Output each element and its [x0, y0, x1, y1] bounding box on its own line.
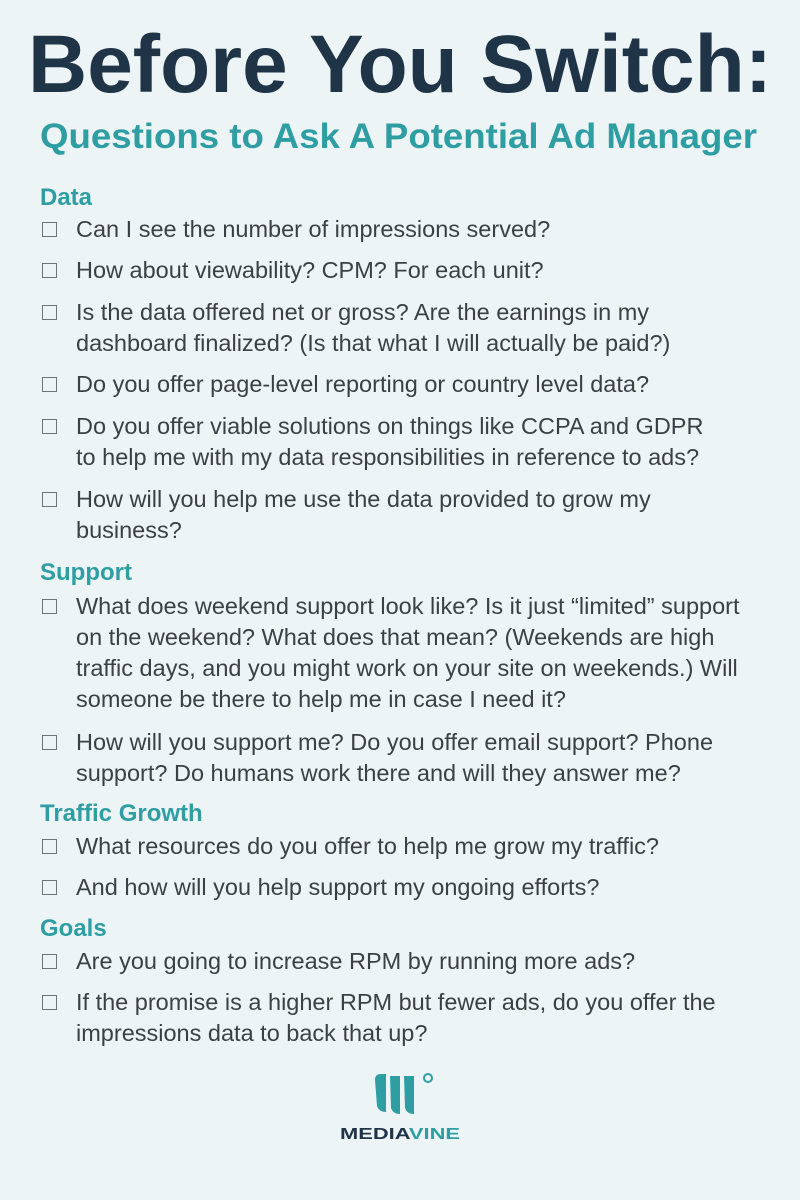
text: Is the data offered net or gross? Are the earnings in my — [76, 299, 649, 325]
text: to help me with my data responsibilities in reference to ads? — [76, 444, 699, 470]
item — [42, 593, 740, 712]
logo: MEDIA VINE — [340, 1126, 460, 1143]
text: Do you offer viable solutions on things like CCPA and GDPR — [76, 413, 703, 439]
text: Can I see the number of impressions served? — [76, 216, 550, 242]
text: Are you going to increase RPM by running more ads? — [76, 948, 635, 974]
text: Do you offer page-level reporting or country level data? — [76, 371, 649, 397]
text: What does weekend support look like? Is it just “limited” support — [76, 593, 740, 619]
text: And how will you help support my ongoing efforts? — [76, 874, 599, 900]
text: How will you help me use the data provided to grow my — [76, 486, 651, 512]
item — [42, 948, 635, 974]
title — [28, 19, 772, 156]
heading: Goals: Goals — [40, 915, 107, 942]
item — [42, 833, 659, 859]
title: Questions to Ask A Potential Ad Manager — [40, 117, 757, 156]
text: business? — [76, 517, 182, 543]
heading: Traffic Growth: Traffic Growth — [40, 800, 203, 827]
item — [42, 989, 716, 1046]
item — [42, 729, 713, 786]
text: support? Do humans work there and will they answer me? — [76, 760, 681, 786]
text: What resources do you offer to help me grow my traffic? — [76, 833, 659, 859]
item — [42, 486, 651, 543]
text: traffic days, and you might work on your site on weekends.) Will — [76, 655, 738, 681]
item — [42, 299, 670, 356]
item — [42, 413, 703, 470]
item — [42, 371, 649, 397]
text: How about viewability? CPM? For each unit? — [76, 257, 544, 283]
item — [42, 216, 550, 242]
text: on the weekend? What does that mean? (Weekends are high — [76, 624, 714, 650]
text: How will you support me? Do you offer email support? Phone — [76, 729, 713, 755]
text: If the promise is a higher RPM but fewer ads, do you offer the — [76, 989, 716, 1015]
title: Before You Switch: — [28, 19, 772, 110]
heading: Support: Support — [40, 559, 132, 586]
item — [42, 257, 544, 283]
text: dashboard finalized? (Is that what I will actually be paid?) — [76, 330, 670, 356]
heading: Data: Data — [40, 184, 92, 211]
text: impressions data to back that up? — [76, 1020, 427, 1046]
item — [42, 874, 599, 900]
text: someone be there to help me in case I need it? — [76, 686, 566, 712]
logo — [340, 1073, 460, 1143]
